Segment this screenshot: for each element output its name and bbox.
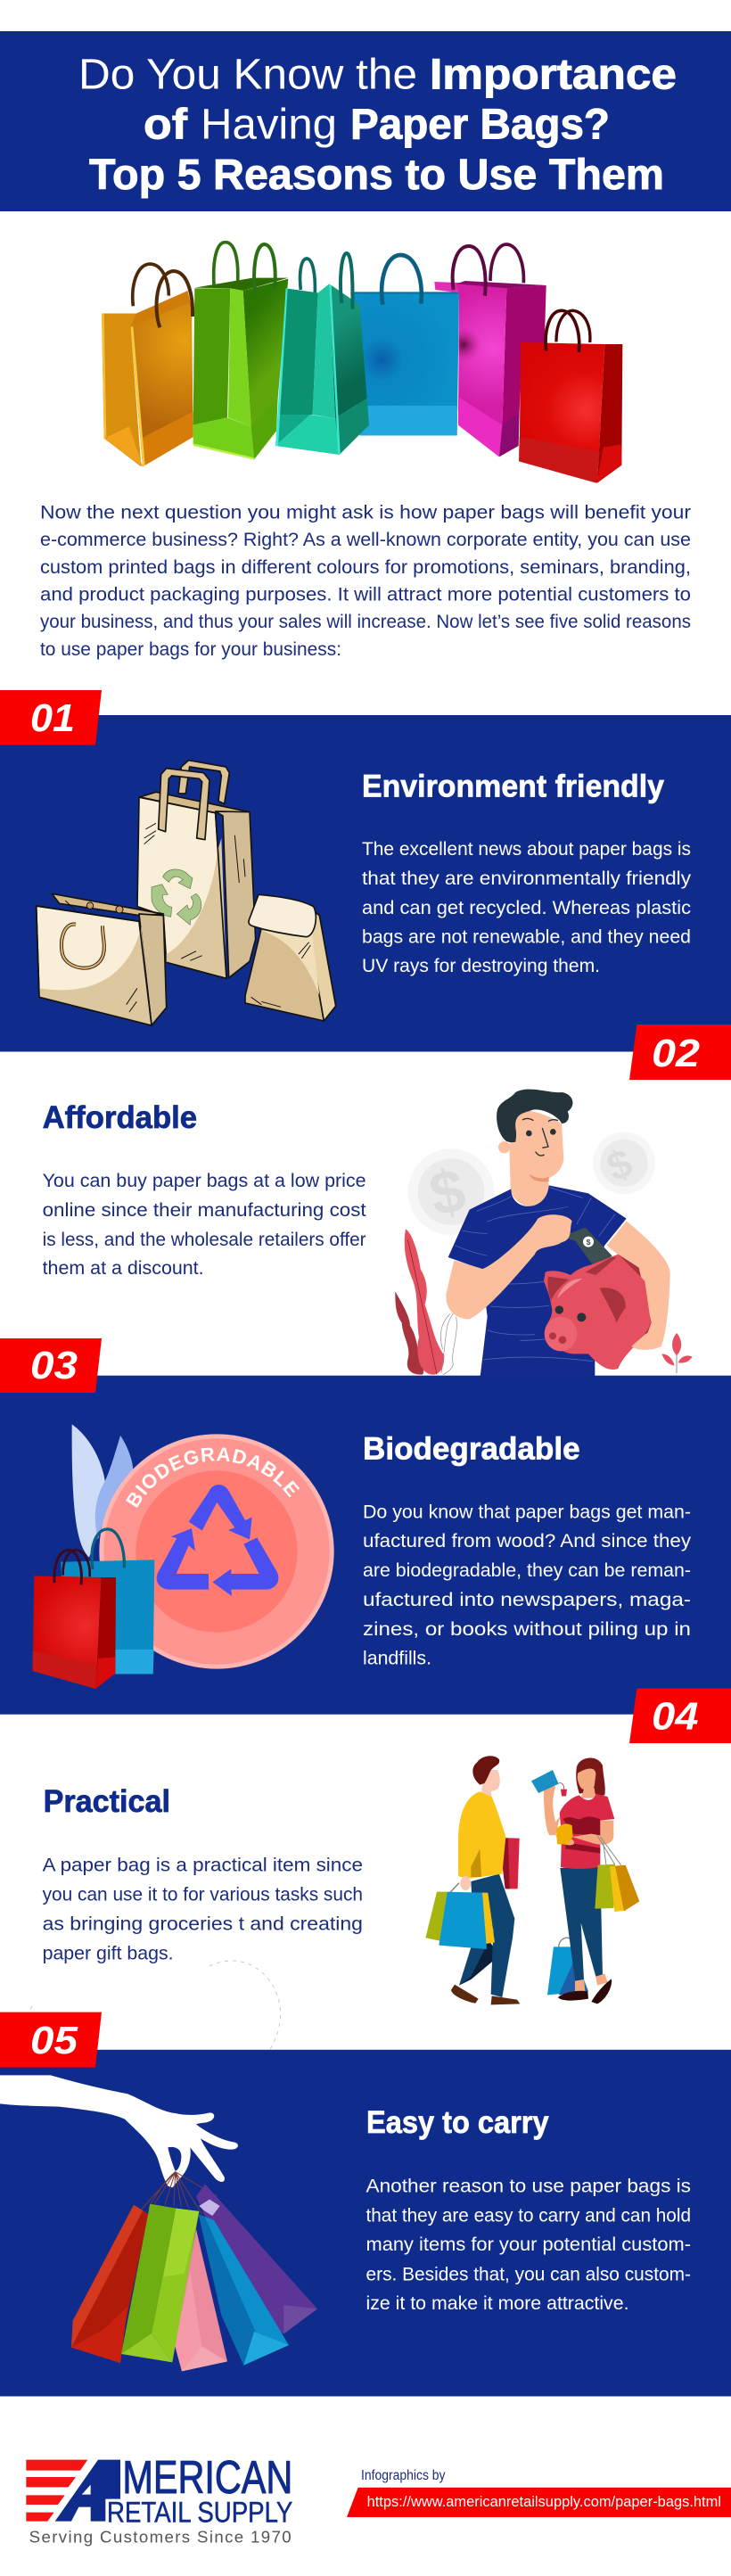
body text: easy to carry: ize it to make it more attractive. [366,2292,629,2314]
teal bag [275,253,369,455]
tagline: Serving Customers Since 1970 [29,2528,292,2547]
purple bag [196,2184,317,2333]
coin right [593,1132,655,1194]
body text: environment friendly: UV rays for destroying them. [362,955,600,976]
man shopper [425,1756,520,2004]
blue bag [199,2214,289,2366]
banknote [562,1228,612,1269]
round badge [99,1434,334,1669]
red bag [519,310,622,483]
credit label: Infographics by [361,2468,446,2483]
intro paragraph: e-commerce business? Right? As a well-known corporate entity, you can use [40,529,691,550]
left arm [446,1214,572,1319]
title line 2: Paper Bags? [350,102,610,149]
intro paragraph: custom printed bags in different colours for promotions, seminars, branding, [40,556,691,578]
title line 2: Having [201,102,337,149]
magenta bag [434,244,546,457]
title line 2 [144,102,610,149]
body text: biodegradable: ufactured into newspapers, maga- [363,1589,691,1610]
body text: affordable: them at a discount. [43,1257,204,1279]
body text: environment friendly: and can get recycled. Whereas plastic [362,897,691,918]
body text: practical: A paper bag is a practical item since [43,1855,363,1876]
intro paragraph: your business, and thus your sales will increase. Now let’s see five solid reasons [40,611,691,632]
recycle symbol [152,869,201,925]
heading: practical: Practical [44,1784,170,1819]
blue bag [61,1529,154,1674]
body text: affordable: You can buy paper bags at a low price [43,1170,366,1191]
small plant right [661,1333,693,1373]
panel 1: environment friendly [0,715,731,1052]
body text: biodegradable [363,1502,691,1669]
body text: affordable: is less, and the wholesale retailers offer [43,1229,366,1250]
bag strings [140,2172,217,2214]
badge 04 [629,1689,731,1743]
body text: affordable [43,1170,366,1279]
body text: practical: paper gift bags. [43,1942,174,1963]
url bar: https://www.americanretailsupply.com/paper-bags.html [367,2493,721,2510]
shirt [448,1185,627,1379]
badge 05: 05 [30,2019,78,2062]
body text: practical: you can use it to for various tasks such [43,1884,363,1905]
body text: easy to carry [366,2176,691,2314]
title line 1 [78,52,677,98]
hero image: colourful shopping bags [102,243,622,483]
badge 02 [629,1025,731,1080]
piggy bank [544,1255,652,1370]
illustration: three kraft paper bags [37,761,336,1025]
right arm [607,1221,670,1350]
woman shopper [531,1758,639,2004]
recycle arrows [157,1485,278,1596]
wordmark: merican: MERICAN [122,2452,292,2504]
red bag [71,2205,149,2363]
plant left [395,1229,456,1375]
curved label: BIODEGRADABLE [126,1448,300,1508]
panel 5: easy to carry [0,2050,731,2397]
intro paragraph: Now the next question you might ask is how paper bags will benefit your [40,502,691,523]
url bar [347,2488,731,2517]
heading: biodegradable: Biodegradable [363,1432,580,1467]
heading: environment friendly: Environment friendly [362,770,665,804]
body text: biodegradable: landfills. [363,1648,431,1669]
badge 02: 02 [652,1032,701,1075]
intro paragraph [40,502,691,660]
tall paper bag with handles [137,761,256,978]
badge 01 [0,690,102,745]
title line 1: Importance [430,52,677,98]
illustration: hand holding shopping bags [0,2075,317,2371]
panel 3: biodegradable [0,1376,731,1715]
body text: practical: as bringing groceries t and creating [43,1913,363,1935]
orange bag [102,264,193,466]
green bag [121,2204,199,2362]
hand under pig [631,1322,664,1350]
title banner [0,31,731,211]
blue bag [350,255,459,435]
body text: environment friendly: that they are environmentally friendly [362,868,691,889]
body text: environment friendly: The excellent news about paper bags is [362,838,691,860]
body text: biodegradable: Do you know that paper bags get man- [363,1502,691,1523]
green bag [193,243,288,460]
illustration: biodegradable badge with bags [32,1425,334,1689]
badge 04: 04 [652,1695,699,1739]
body text: biodegradable: ufactured from wood? And since they [363,1530,691,1551]
body text: biodegradable: are biodegradable, they can be reman- [363,1560,691,1581]
intro paragraph: and product packaging purposes. It will attract more potential customers to [40,583,691,605]
title line 1: Do You Know the [78,52,417,98]
hand silhouette [0,2075,238,2187]
title line 2: of [144,102,188,149]
man head and neck [497,1090,572,1207]
red stripes [26,2460,87,2522]
wordmark: retail supply: RETAIL SUPPLY [107,2495,293,2528]
body text: practical [43,1855,363,1963]
rolled top bag [245,894,336,1021]
body text: easy to carry: ers. Besides that, you can also custom- [366,2263,691,2284]
badge 01: 01 [30,696,75,740]
body text: easy to carry: Another reason to use paper bags is [366,2176,691,2197]
body text: environment friendly: bags are not renewable, and they need [362,926,691,947]
body text: affordable: online since their manufacturing cost [43,1199,366,1221]
illustration: man with piggy bank [395,1090,693,1379]
body text: easy to carry: that they are easy to carry and can hold [366,2205,691,2226]
heading: easy to carry: Easy to carry [366,2105,549,2140]
big letter A [55,2460,120,2522]
title line 3: Top 5 Reasons to Use Them [89,152,664,199]
body text: easy to carry: many items for your potential custom- [366,2234,691,2255]
red bag [33,1550,116,1689]
body text: environment friendly [362,838,691,976]
leaves [72,1424,133,1558]
short bag with rope handle [37,893,167,1025]
pink bag [175,2229,227,2371]
badge 05 [0,2012,102,2068]
coin left: $ [423,1156,471,1230]
heading: affordable: Affordable [43,1100,197,1135]
badge 03: 03 [30,1344,78,1387]
coin right: $ [601,1140,638,1190]
coin left [408,1148,494,1235]
logo: American Retail Supply [26,2452,293,2547]
dashed arc decoration [9,1961,481,2332]
intro paragraph: to use paper bags for your business: [40,638,341,660]
banknote: $ [587,1238,591,1247]
badge 03 [0,1338,102,1393]
illustration: two shoppers [425,1756,639,2004]
body text: biodegradable: zines, or books without piling up in [363,1618,691,1640]
